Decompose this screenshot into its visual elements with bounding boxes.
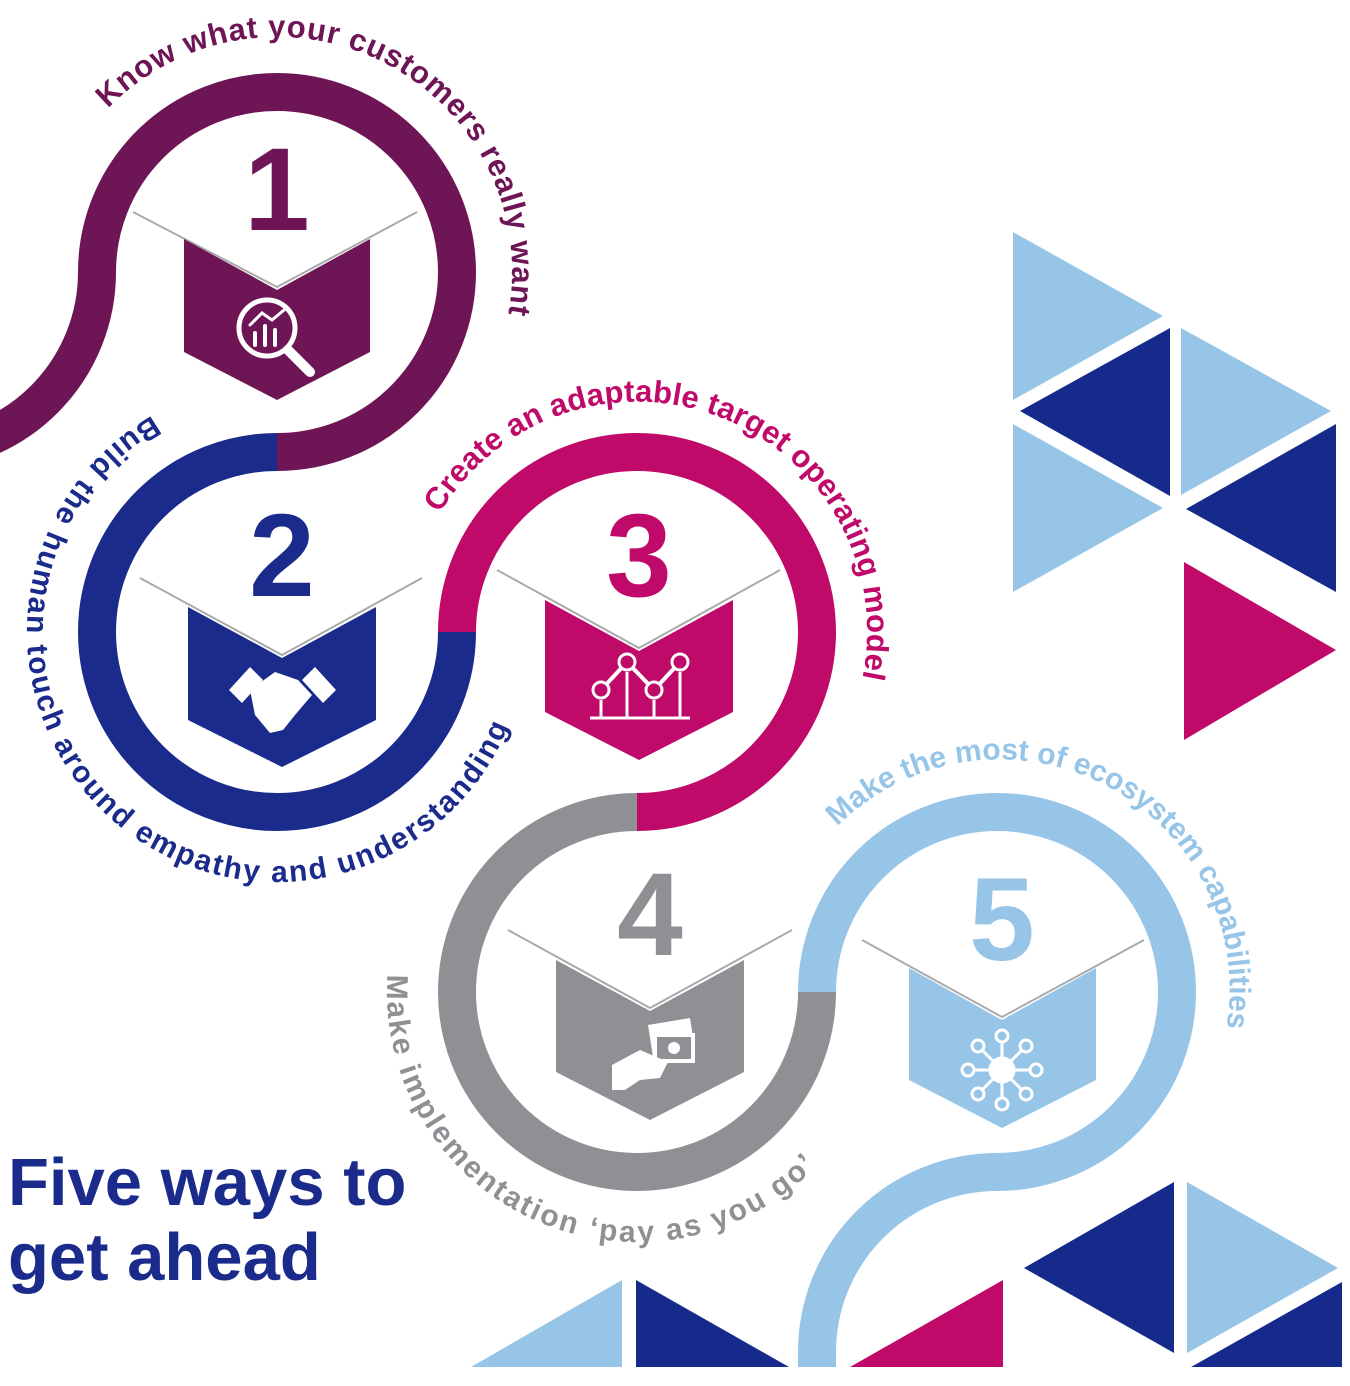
- chevron 2: [188, 607, 376, 767]
- icon: hand with money: [612, 1018, 695, 1090]
- number 4: 4: [617, 849, 683, 981]
- label 3: Create an adaptable target operating model: [426, 380, 890, 680]
- label 4: Make implementation ‘pay as you go’: [386, 976, 806, 1248]
- label 1: Know what your customers really want: [94, 18, 530, 316]
- step 3: [426, 380, 890, 760]
- path segment 1 purple: [0, 92, 457, 452]
- number 1: 1: [244, 124, 310, 256]
- decorative triangles top right: [1013, 232, 1336, 740]
- icon: line chart: [590, 654, 690, 718]
- title: get ahead: [8, 1220, 321, 1295]
- title: Five ways to: [8, 1145, 406, 1220]
- step 4: [386, 849, 806, 1248]
- path segment 4 gray: [457, 812, 817, 1172]
- icon: magnifier chart: [239, 300, 310, 372]
- decorative triangles bottom: [471, 1182, 1342, 1367]
- path segment 5 light blue: [817, 812, 1177, 1367]
- icon: handshake: [229, 667, 336, 733]
- path segment 2 blue: [97, 452, 457, 812]
- step 1: [94, 18, 530, 400]
- step 2: [26, 416, 512, 886]
- chevron 1: [184, 239, 370, 400]
- chevron 3: [545, 600, 733, 760]
- path segment 3 magenta: [457, 452, 817, 812]
- step 5: [824, 741, 1252, 1128]
- label 5: Make the most of ecosystem capabilities: [824, 741, 1252, 1028]
- label 2: Build the human touch around empathy and understanding: [26, 416, 512, 886]
- chevron 4: [556, 960, 744, 1120]
- number 2: 2: [249, 490, 315, 622]
- chevron 5: [909, 968, 1096, 1128]
- number 5: 5: [969, 854, 1035, 986]
- icon: network: [962, 1030, 1042, 1110]
- number 3: 3: [606, 490, 672, 622]
